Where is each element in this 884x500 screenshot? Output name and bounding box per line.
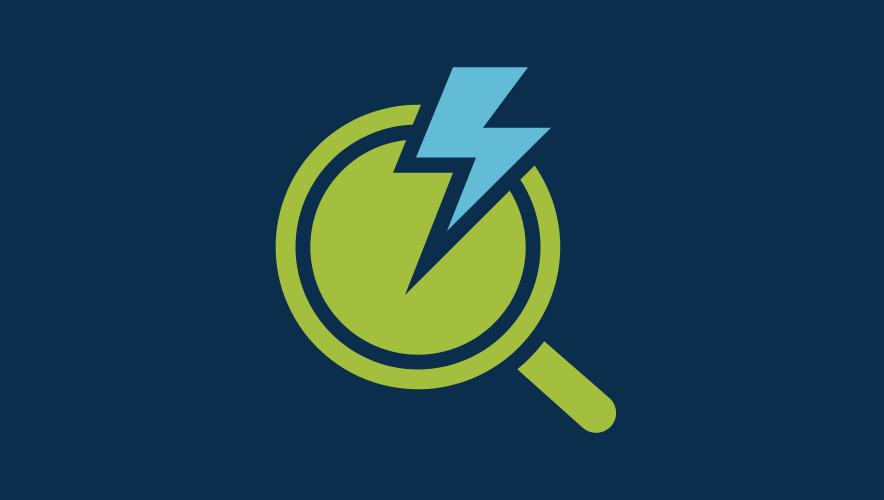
- magnifier lens disc with bolt cut-out: [310, 140, 526, 355]
- magnifier ring: [276, 105, 560, 389]
- magnifier handle: [517, 341, 616, 433]
- icon: lightning bolt: [416, 67, 551, 231]
- icon: magnifying glass: [276, 105, 616, 433]
